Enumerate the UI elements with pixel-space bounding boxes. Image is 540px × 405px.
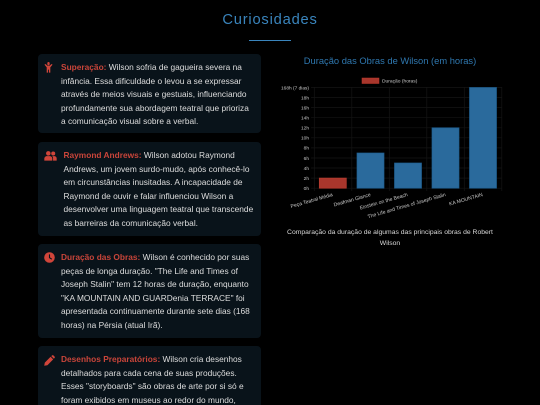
text: raymond andrews: desenvolver uma linguagem teatral que transcende — [64, 204, 253, 214]
chart caption: Comparação da duração de algumas das principais obras de Robert Wilson — [287, 229, 493, 246]
bar chart — [281, 78, 502, 220]
text: duração das obras: "KA MOUNTAIN AND GUARDenia TERRACE" foi — [61, 292, 245, 302]
x axis labels: The Life and Times of Joseph Stalin — [367, 192, 447, 220]
y axis labels: 12h — [301, 126, 309, 132]
text: raymond andrews: em circunstâncias inusitadas. A incapacidade de — [64, 177, 243, 187]
text: desenhos preparatórios: detalhados para cada cena de suas produções. — [61, 368, 237, 378]
chart heading: Duração das Obras de Wilson (em horas) — [304, 56, 476, 66]
title: Curiosidades — [222, 12, 318, 28]
x axis labels: Einstein on the Beach — [359, 192, 409, 212]
y axis labels: 14h — [301, 116, 309, 122]
panel: superação — [38, 54, 261, 133]
y axis labels: 4h — [304, 166, 309, 172]
text: raymond andrews: Raymond de ouvir e falar influenciou Wilson a — [64, 190, 233, 200]
panel: raymond andrews — [38, 142, 261, 236]
x axis labels: Deafman Glance — [333, 192, 372, 208]
y axis labels: 8h — [304, 146, 309, 152]
y axis labels: 6h — [304, 156, 309, 162]
y axis labels: 10h — [301, 136, 309, 142]
legend: Duração (horas) — [382, 79, 418, 85]
text: duração das obras: peças de longa duração. "The Life and Times of — [61, 266, 238, 276]
text: duração das obras: apresentada continuamente durante sete dias (168 — [61, 306, 250, 316]
text: raymond andrews — [64, 150, 253, 228]
icon: pencil — [44, 355, 55, 366]
y axis labels: 0h — [304, 186, 309, 192]
text: desenhos preparatórios: Desenhos Preparatórios: Wilson cria desenhos — [61, 354, 242, 364]
text: superação: profundamente sua abordagem teatral que prioriza — [61, 102, 249, 112]
text: duração das obras: Duração das Obras: Wilson é conhecido por suas — [61, 252, 249, 262]
x axis labels: KA MOUNTAIN — [449, 192, 484, 207]
icon: users — [44, 151, 57, 161]
panel: duração das obras — [38, 244, 261, 338]
text: duração das obras: horas) na Pérsia (atual Irã). — [61, 320, 163, 330]
text: raymond andrews: Andrews, um jovem surdo-mudo, após conhecê-lo — [64, 164, 249, 174]
text: desenhos preparatórios: Esses "storyboards" são obras de arte por si só e — [61, 381, 244, 391]
icon: clock — [44, 252, 55, 263]
text: raymond andrews: Raymond Andrews: Wilson adotou Raymond — [64, 150, 235, 160]
text: duração das obras: Joseph Stalin" tem 12 horas de duração, enquanto — [61, 279, 249, 289]
text: superação: Superação: Wilson sofria de gagueira severa na — [61, 62, 242, 72]
text: desenhos preparatórios: foram exibidos em museus ao redor do mundo, — [61, 394, 236, 404]
text: desenhos preparatórios — [61, 354, 244, 404]
text: superação — [61, 62, 249, 126]
y axis labels: 16h — [301, 105, 309, 111]
text: superação: a comunicação visual sobre a verbal. — [61, 116, 198, 126]
y axis labels: 168h (7 dias) — [281, 85, 309, 91]
bars — [319, 88, 496, 188]
legend — [362, 78, 418, 85]
text: raymond andrews: as barreiras da comunicação verbal. — [64, 218, 198, 228]
panel: desenhos preparatórios — [38, 346, 261, 405]
text: superação: através de meios visuais e gestuais, influenciando — [61, 89, 247, 99]
y axis labels: 18h — [301, 95, 309, 101]
x axis labels: Peça Teatral Média — [290, 192, 334, 210]
y axis labels: 2h — [304, 176, 309, 182]
title underline — [249, 40, 291, 41]
text: duração das obras — [61, 252, 250, 330]
text: superação: infância. Essa dificuldade o levou a se expressar — [61, 76, 241, 86]
x axis labels — [290, 192, 484, 220]
icon: child figure — [44, 62, 52, 73]
y axis labels — [281, 85, 309, 192]
